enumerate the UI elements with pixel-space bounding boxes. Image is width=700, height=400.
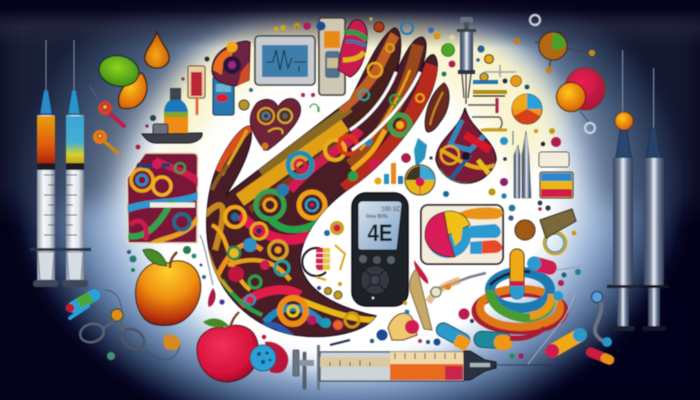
icon: pie chart ball (512, 94, 542, 124)
icon: scattered dots right (369, 17, 561, 199)
icon: orange key (93, 130, 118, 153)
icon: blue crystal (414, 138, 427, 168)
right syringe plain (639, 68, 669, 331)
icon: small label box (539, 152, 569, 167)
icon: small finger lobe (425, 83, 449, 132)
chart card: pie and bars (421, 205, 503, 264)
icon: vertical capsule (510, 249, 524, 299)
icon: small syringe tool and cone (370, 260, 486, 343)
left syringe orange (30, 40, 61, 287)
meter reading: 4E (368, 220, 392, 247)
icon: medicine bottle on tray (136, 88, 202, 149)
icon: teal bead (107, 352, 115, 360)
icon: orange drop (145, 32, 169, 68)
icon: telescope tube with ring (508, 201, 576, 254)
icon: red vial (188, 66, 205, 115)
icon: orange leaf (164, 335, 180, 350)
icon: red key (90, 86, 124, 126)
icon: teardrop pattern (436, 108, 496, 186)
panel: pattern square (125, 153, 200, 245)
icon: silver pens (513, 131, 531, 198)
icon: molecule (514, 15, 595, 73)
icon: red capsule near bands (526, 255, 581, 301)
icon: cartridge device (319, 18, 345, 95)
icon: heart monitor (255, 36, 315, 85)
icon: colourful finger tip (338, 20, 367, 77)
icon: pattern heart (250, 99, 301, 150)
icon: red and yellow capsule balls (556, 68, 605, 133)
meter small readout: 100 1C (381, 207, 401, 213)
icon: blue box (213, 77, 234, 115)
icon: red apple with blue cap (197, 312, 288, 382)
icon: coloured bands (476, 272, 564, 330)
icon: striped box (540, 172, 573, 198)
icon: small bar chart (374, 163, 403, 184)
icon: capsule chain (418, 308, 545, 351)
right syringe with ball (607, 50, 638, 331)
icon: green and orange fruit (96, 52, 147, 108)
icon: hook tool (592, 292, 612, 347)
hand illustration (205, 28, 437, 340)
icon: small gauge in inner blob (302, 221, 345, 299)
icon: scissors (78, 290, 180, 360)
icon: top vertical syringe (457, 17, 476, 104)
icon: small capsule pen (65, 287, 103, 318)
meter small readout second line: Rew 80% (366, 214, 388, 220)
icon: yellow radial disc (405, 165, 435, 195)
icon: camera device (212, 41, 250, 86)
icon: lines and tube diagram (468, 65, 516, 130)
icon: bottom horizontal syringe (293, 340, 552, 390)
icon: blood glucose meter (352, 193, 408, 306)
icon: bottom right capsules (509, 295, 616, 366)
left syringe blue (61, 40, 91, 287)
icon: orange apple (127, 235, 225, 325)
icon: top dots row (181, 21, 326, 112)
